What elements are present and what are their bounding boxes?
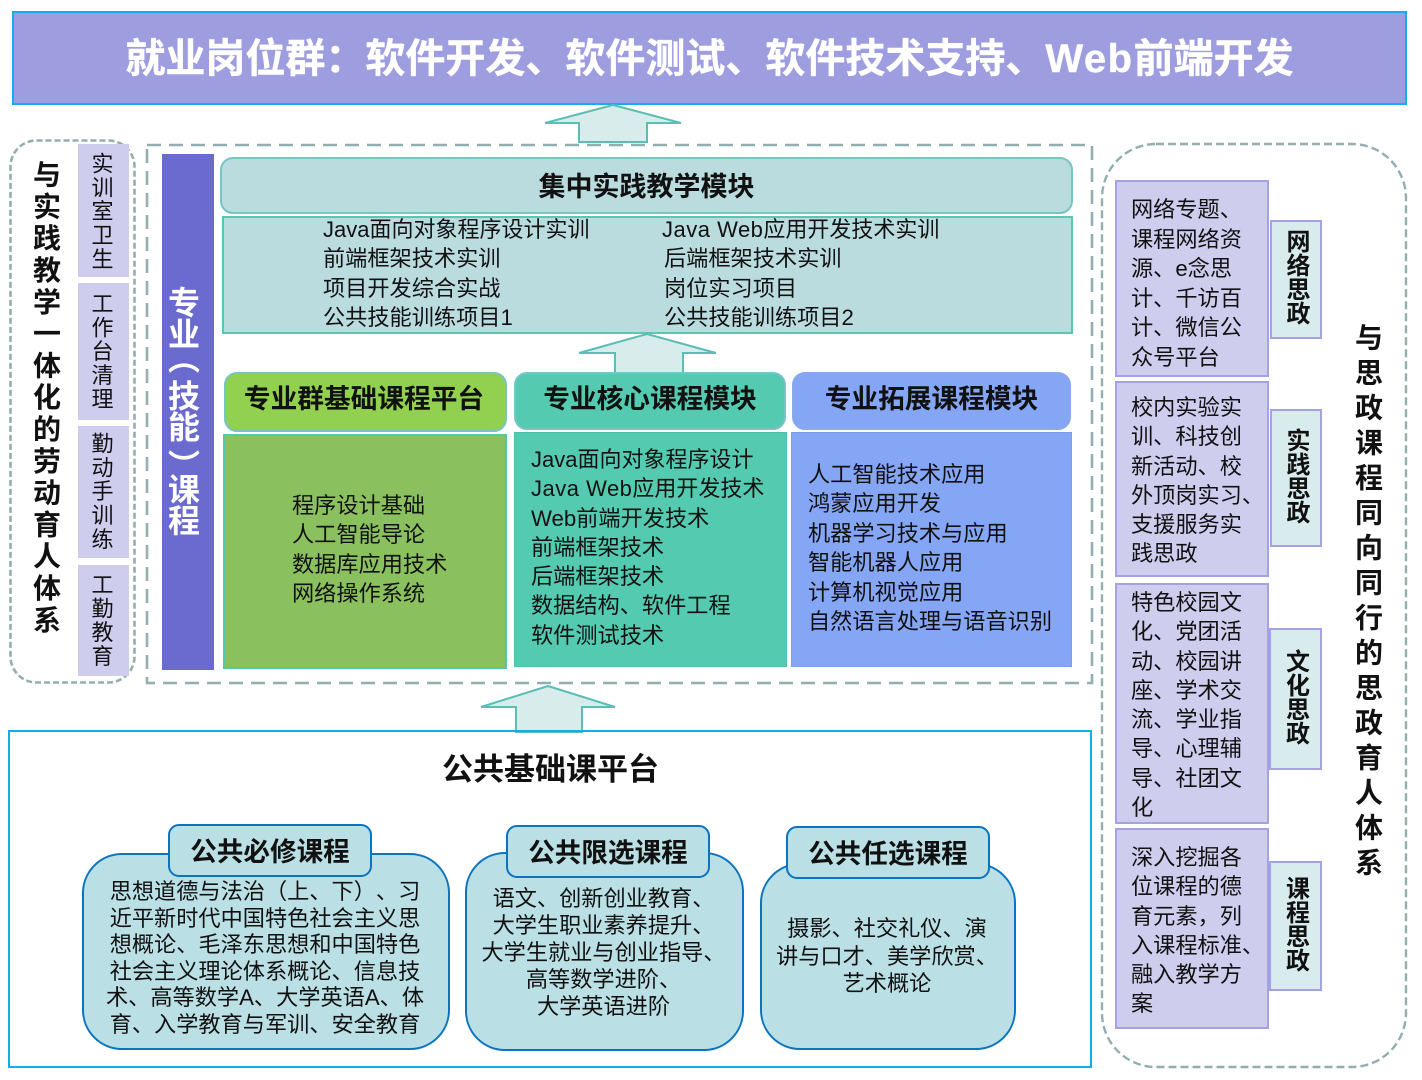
tag: online ideology: 网络思政 — [1282, 229, 1309, 325]
text: online resources: 计、千访百 — [1131, 286, 1242, 310]
text: extension courses: 计算机视觉应用 — [808, 580, 963, 605]
heading: intensive practice module: 集中实践教学模块 — [538, 172, 754, 202]
text: required courses: 近平新时代中国特色社会主义思 — [110, 906, 420, 931]
heading: labour education system: 与实践教学一体化的劳动育人体系 — [30, 160, 61, 637]
text: core courses: 前端框架技术 — [531, 535, 664, 560]
text: extension courses: 机器学习技术与应用 — [808, 521, 1008, 546]
text: extension courses: 鸿蒙应用开发 — [808, 491, 941, 516]
text: culture: 动、校园讲 — [1131, 649, 1242, 674]
text: extension courses: 智能机器人应用 — [808, 550, 963, 575]
text: online resources: 网络专题、 — [1131, 197, 1242, 222]
text: core courses — [531, 447, 764, 648]
text: core courses: 软件测试技术 — [531, 623, 664, 648]
panel: intensive practice list — [222, 216, 1073, 334]
text: open elective courses: 讲与口才、美学欣赏、 — [776, 944, 998, 968]
heading: foundation platform — [224, 372, 507, 432]
text: required courses: 想概论、毛泽东思想和中国特色 — [110, 932, 420, 957]
item: hands-on training: 勤动手训练 — [88, 432, 114, 552]
heading: required courses: 公共必修课程 — [190, 836, 350, 866]
heading: intensive practice module — [220, 157, 1073, 214]
item: work-study education — [78, 565, 129, 676]
text: culture: 化 — [1131, 795, 1153, 820]
text: extension courses: 自然语言处理与语音识别 — [808, 609, 1052, 634]
tag: practice ideology: 实践思政 — [1282, 428, 1309, 524]
text: curriculum: 融入教学方 — [1131, 962, 1242, 987]
text: limited elective courses: 大学生就业与创业指导、 — [481, 940, 726, 965]
item: training room hygiene — [78, 144, 129, 277]
text: practice — [1131, 395, 1264, 566]
heading: open elective courses — [786, 826, 990, 879]
heading: required courses — [168, 824, 372, 877]
tag: online ideology — [1270, 220, 1322, 339]
item: workbench cleaning: 工作台清理 — [88, 292, 114, 411]
text: practice: 支援服务实 — [1131, 512, 1242, 537]
text: limited elective courses — [481, 886, 726, 1019]
text: practice right column: 公共技能训练项目2 — [664, 305, 854, 330]
arrow: modules to practice — [578, 333, 716, 372]
item: workbench cleaning — [78, 283, 129, 420]
panel: core courses — [514, 432, 787, 667]
text: culture: 流、学业指 — [1131, 707, 1242, 732]
text: practice left column: 前端框架技术实训 — [323, 246, 500, 271]
text: curriculum: 入课程标准、 — [1131, 933, 1264, 958]
card: practice — [1115, 381, 1269, 577]
text: online resources: 源、e念思 — [1131, 256, 1232, 281]
panel: professional courses — [146, 144, 1094, 684]
heading: ideological education system: 与思政课程同向同行的思政育人体系 — [1352, 323, 1383, 883]
arrow: to job groups — [544, 104, 682, 143]
text: required courses — [106, 879, 424, 1037]
card: culture — [1115, 583, 1269, 824]
text: required courses: 社会主义理论体系概论、信息技 — [110, 959, 420, 984]
text: practice right column — [662, 217, 939, 330]
text: foundation courses — [292, 493, 447, 606]
text: practice right column: 岗位实习项目 — [664, 276, 797, 301]
side label: professional skill courses: 专业（ 技能 ）课程 — [164, 286, 200, 534]
text: foundation courses: 程序设计基础 — [292, 493, 425, 518]
tag: culture ideology: 文化思政 — [1282, 648, 1308, 744]
text: curriculum: 案 — [1131, 991, 1153, 1016]
title banner: 就业岗位群：软件开发、软件测试、软件技术支持、Web前端开发 — [125, 36, 1294, 80]
text: extension courses — [808, 462, 1052, 634]
heading: core module — [514, 372, 786, 430]
panel: foundation courses — [223, 434, 507, 669]
text: practice left column: 项目开发综合实战 — [323, 276, 500, 301]
text: open elective courses: 摄影、社交礼仪、演 — [787, 916, 987, 941]
text: core courses: 后端框架技术 — [531, 564, 664, 589]
text: curriculum: 育元素，列 — [1131, 904, 1242, 929]
text: limited elective courses: 高等数学进阶、 — [526, 967, 681, 992]
text: culture: 座、学术交 — [1131, 678, 1242, 703]
text: foundation courses: 网络操作系统 — [292, 581, 425, 606]
heading: limited elective courses: 公共限选课程 — [528, 838, 688, 868]
text: practice: 训、科技创 — [1131, 424, 1242, 449]
tag: curriculum ideology: 课程思政 — [1282, 876, 1308, 972]
text: practice: 校内实验实 — [1131, 395, 1242, 420]
text: practice left column: 公共技能训练项目1 — [323, 305, 513, 330]
text: foundation courses: 人工智能导论 — [292, 522, 425, 547]
panel: ideological education — [1100, 142, 1408, 1068]
text: practice left column: Java面向对象程序设计实训 — [323, 217, 589, 242]
heading: extension module — [792, 372, 1071, 430]
item: work-study education: 工勤教育 — [88, 573, 114, 668]
text: practice: 践思政 — [1131, 541, 1198, 566]
text: required courses: 术、高等数学A、大学英语A、体 — [106, 985, 424, 1010]
text: curriculum: 位课程的德 — [1131, 874, 1242, 899]
text: required courses: 育、入学教育与军训、安全教育 — [110, 1012, 420, 1037]
tag: culture ideology — [1269, 628, 1322, 770]
card: curriculum — [1115, 828, 1269, 1029]
text: core courses: Java面向对象程序设计 — [531, 447, 753, 472]
text: online resources: 计、微信公 — [1131, 315, 1242, 340]
text: limited elective courses: 大学生职业素养提升、 — [493, 913, 714, 938]
text: online resources — [1131, 197, 1242, 370]
panel: limited elective courses — [465, 852, 744, 1051]
side label: professional skill courses — [162, 154, 214, 670]
panel: required courses — [82, 853, 450, 1050]
text: limited elective courses: 大学英语进阶 — [537, 994, 670, 1019]
panel: labour education — [9, 139, 136, 684]
heading: limited elective courses — [506, 825, 710, 878]
text: practice right column: 后端框架技术实训 — [664, 246, 842, 271]
text: curriculum — [1131, 845, 1264, 1016]
text: culture — [1131, 590, 1242, 820]
text: open elective courses: 艺术概论 — [843, 971, 931, 996]
text: culture: 特色校园文 — [1131, 590, 1242, 615]
text: practice: 新活动、校 — [1131, 454, 1242, 479]
text: foundation courses: 数据库应用技术 — [292, 552, 447, 577]
text: culture: 导、心理辅 — [1131, 736, 1242, 761]
text: practice: 外顶岗实习、 — [1131, 483, 1264, 508]
text: culture: 导、社团文 — [1131, 766, 1242, 791]
arrow: public platform to modules — [480, 685, 616, 733]
heading: public foundation platform: 公共基础课平台 — [442, 752, 659, 787]
text: practice left column — [323, 217, 589, 330]
tag: practice ideology — [1270, 409, 1322, 547]
item: hands-on training — [78, 426, 129, 558]
tag: curriculum ideology — [1269, 861, 1322, 991]
text: core courses: Web前端开发技术 — [531, 506, 709, 531]
heading: foundation platform: 专业群基础课程平台 — [244, 384, 484, 414]
text: online resources: 课程网络资 — [1131, 226, 1242, 252]
text: limited elective courses: 语文、创新创业教育、 — [493, 886, 714, 911]
text: practice right column: Java Web应用开发技术实训 — [662, 217, 939, 242]
panel: extension courses — [791, 432, 1072, 667]
heading: core module: 专业核心课程模块 — [543, 384, 757, 414]
heading: extension module: 专业拓展课程模块 — [825, 384, 1038, 414]
card: online resources — [1115, 180, 1269, 377]
heading: open elective courses: 公共任选课程 — [808, 838, 968, 868]
text: core courses: Java Web应用开发技术 — [531, 476, 764, 501]
title banner — [12, 11, 1407, 105]
text: curriculum: 深入挖掘各 — [1131, 845, 1242, 870]
text: core courses: 数据结构、软件工程 — [531, 593, 731, 618]
text: open elective courses — [776, 916, 998, 996]
text: online resources: 众号平台 — [1131, 344, 1220, 370]
text: culture: 化、党团活 — [1131, 619, 1242, 644]
panel: open elective courses — [760, 863, 1016, 1050]
text: extension courses: 人工智能技术应用 — [808, 462, 986, 487]
panel: public foundation platform — [8, 730, 1092, 1068]
text: required courses: 思想道德与法治（上、下）、习 — [110, 879, 420, 904]
item: training room hygiene: 实训室卫生 — [88, 152, 114, 271]
